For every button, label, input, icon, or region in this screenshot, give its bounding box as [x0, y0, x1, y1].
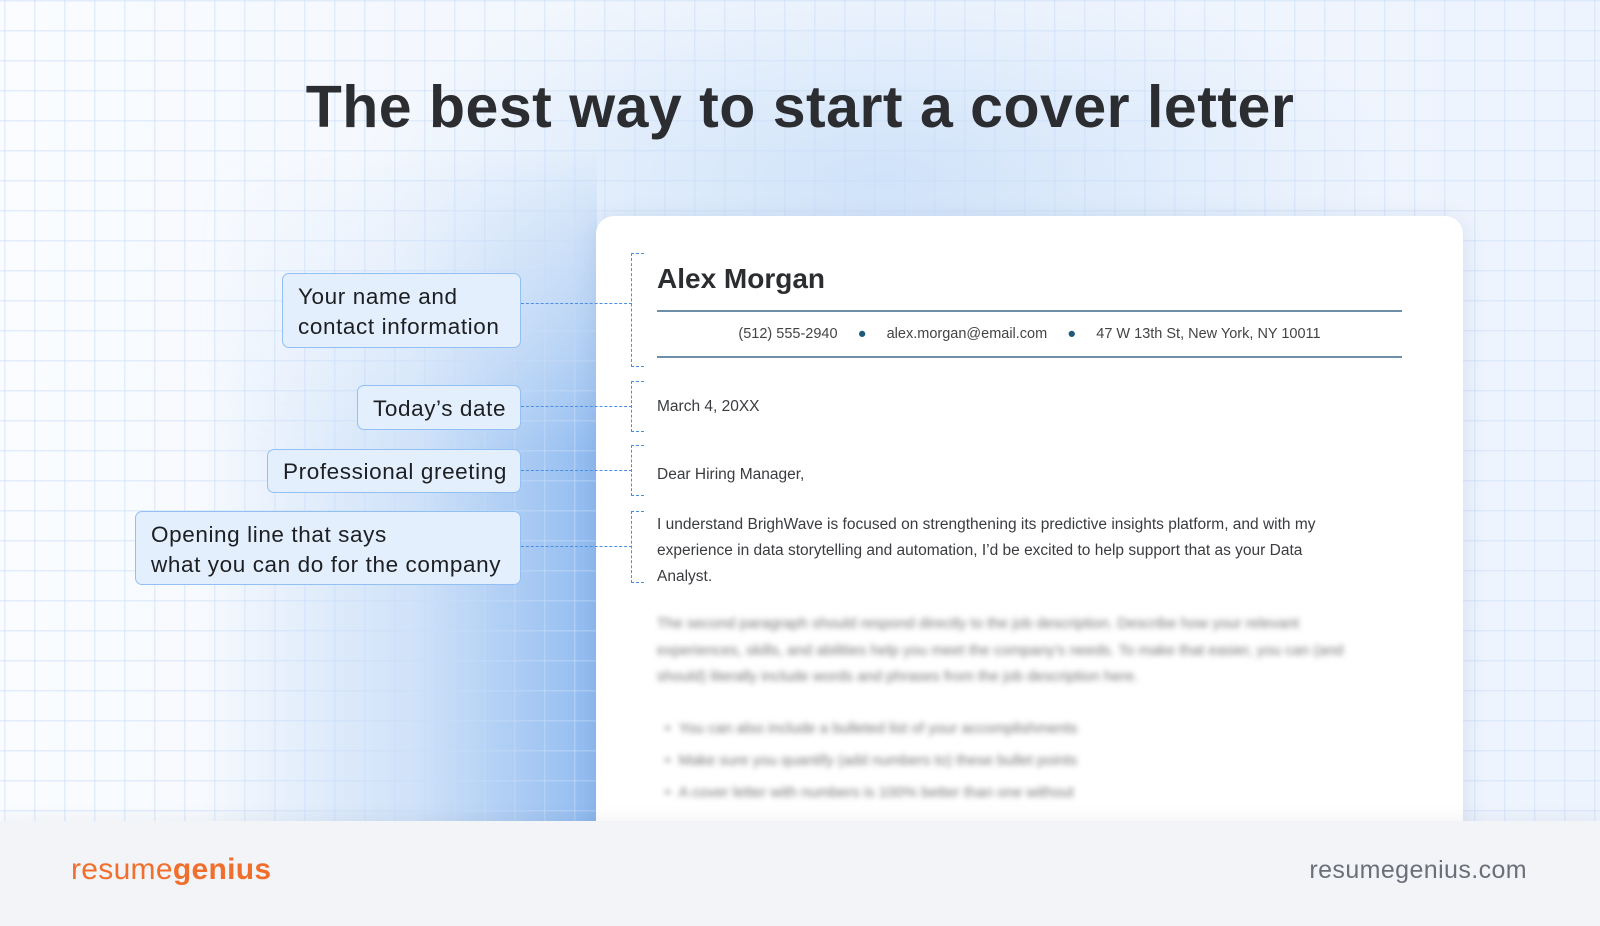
label: date [357, 385, 521, 430]
blurred bullets [662, 720, 1080, 801]
label: greeting [267, 449, 521, 493]
label: opening line [135, 511, 521, 585]
blurred paragraph: The second paragraph should respond directly to the job description. Describe how your relevant experiences, skills, and abilities help you meet the company’s needs. To make that easier, you can (and should) literally include words and phrases from the job description here. [657, 615, 1344, 685]
label: name and contact [282, 273, 521, 348]
label: greeting: Professional greeting [283, 459, 507, 484]
logo: resumegenius [71, 853, 271, 886]
date text: March 4, 20XX [657, 398, 760, 415]
footer [0, 821, 1600, 926]
bracket 2 [631, 381, 644, 432]
panel: cover letter card [596, 216, 1463, 856]
connector 2 [521, 406, 632, 407]
bracket 3 [631, 445, 644, 496]
connector 3 [521, 470, 632, 471]
greeting text: Dear Hiring Manager, [657, 466, 804, 483]
bracket 1 [631, 253, 644, 367]
label: date: Today’s date [373, 396, 506, 421]
blurred bullets: • A cover letter with numbers is 100% better than one without [665, 784, 1074, 801]
blurred bullets: • You can also include a bulleted list of your accomplishments [665, 720, 1077, 737]
label: name and contact: contact information [298, 314, 500, 339]
blurred bullets: • Make sure you quantify (add numbers to) these bullet points [665, 752, 1077, 769]
title: The best way to start a cover letter [306, 74, 1294, 140]
label: opening line: what you can do for the company [151, 552, 501, 577]
connector 1 [521, 303, 632, 304]
website: resumegenius.com [1309, 856, 1527, 884]
name heading: Alex Morgan [657, 263, 825, 294]
divider [657, 310, 1402, 312]
bracket 4 [631, 511, 644, 583]
label: opening line: Opening line that says [151, 522, 387, 547]
contact line: (512) 555-2940 ● alex.morgan@email.com ● 47 W 13th St, New York, NY 10011 [738, 326, 1321, 342]
label: name and contact: Your name and [298, 284, 458, 309]
opening paragraph: I understand BrighWave is focused on strengthening its predictive insights platform, and with my experience in data storytelling and automation, I’d be excited to help support that as your Data Analyst. [657, 516, 1316, 585]
connector 4 [521, 546, 632, 547]
